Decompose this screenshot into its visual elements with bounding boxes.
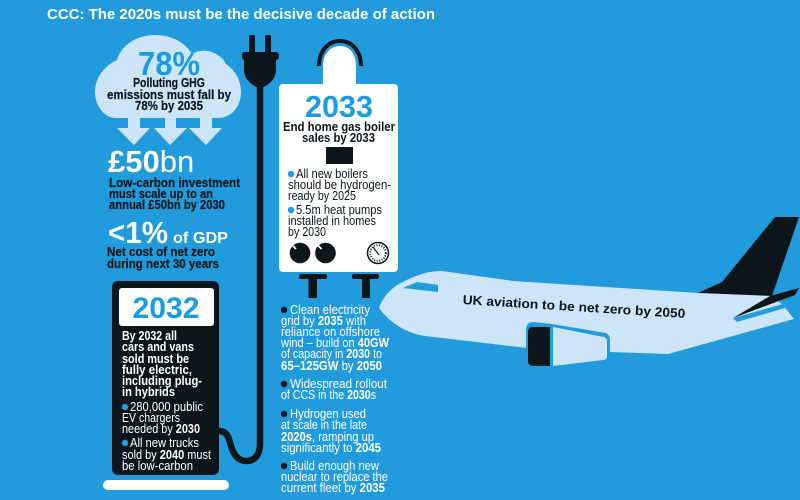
cloud text [107, 76, 231, 113]
year badge: 2032 [119, 288, 214, 326]
GDP text: Net cost of net zero [107, 245, 215, 259]
GDP text: during next 30 years [107, 257, 219, 271]
2032 headline text: cars and vans [122, 340, 194, 354]
cloud: 78% emissions stat [95, 35, 241, 118]
bullet: hydrogen-ready boilers: All new boilers [296, 167, 368, 181]
bullet: CCS: of CCS in the 2030s [281, 388, 376, 402]
bullet: heat pumps: 5.5m heat pumps [296, 203, 382, 217]
bullet list: energy targets [280, 303, 389, 495]
bullet: nuclear: Build enough new [290, 459, 380, 473]
stat: less than 1% of GDP: of GDP [173, 230, 228, 247]
GDP text [107, 245, 219, 271]
stat: less than 1% of GDP: <1% [108, 215, 168, 250]
stat: less than 1% of GDP [107, 215, 228, 271]
bullet: EV chargers [122, 400, 203, 436]
bullet: heat pumps: by 2030 [288, 225, 326, 239]
bullet: hydrogen-ready boilers: ready by 2025 [288, 189, 356, 203]
bullet: clean electricity: 65–125GW by 2050 [281, 359, 382, 373]
investment text: Low-carbon investment [109, 176, 241, 190]
bullet: clean electricity: grid by 2035 with [281, 314, 366, 328]
boiler display [326, 147, 353, 164]
2032 headline text: By 2032 all [122, 329, 177, 343]
illustration: aeroplane [379, 217, 799, 367]
bullet: hydrogen: 2020s, ramping up [281, 430, 374, 444]
year: 2033: 2033 [305, 89, 373, 124]
cockpit window [403, 282, 438, 292]
bullet: low-carbon trucks: be low-carbon [122, 459, 193, 473]
2032 headline text: fully electric, [122, 363, 192, 377]
bullet: low-carbon trucks: sold by 2040 must [122, 448, 211, 462]
2032 headline text [122, 329, 202, 399]
cloud text: emissions must fall by [107, 88, 231, 102]
aviation label: UK aviation to be net zero by 2050 [462, 292, 686, 321]
tail stabiliser stripe [733, 304, 785, 322]
bullet: heat pumps: installed in homes [288, 214, 376, 228]
boiler dial left [290, 243, 310, 263]
big figure: 78%: 78% [138, 45, 200, 82]
bullet: heat pumps [288, 203, 382, 239]
bullet: low-carbon trucks [122, 436, 211, 473]
icon: boiler flue [319, 41, 361, 84]
icon: plug [242, 35, 279, 87]
boiler headline [283, 120, 395, 145]
bullet: hydrogen [281, 407, 381, 455]
panel: 2032 electric cars [112, 281, 219, 475]
2032 headline text: sold must be [122, 352, 189, 366]
bullet: EV chargers: 280,000 public [130, 400, 203, 414]
cloud text: 78% by 2035 [135, 99, 203, 113]
boiler pressure gauge [368, 242, 388, 264]
stat: £50bn investment [108, 144, 241, 212]
icon: three down arrows [117, 118, 222, 145]
title: CCC: The 2020s must be the decisive decade of action [47, 7, 435, 23]
cloud text: Polluting GHG [133, 76, 205, 90]
investment text: must scale up to an [109, 187, 213, 201]
panel: 2033 gas boiler [279, 84, 398, 272]
plug cord [219, 85, 260, 461]
white stand bar [103, 480, 229, 490]
bullet: hydrogen: Hydrogen used [290, 407, 366, 421]
bullet: clean electricity [280, 303, 389, 373]
tail fin [698, 217, 799, 296]
boiler dial right [315, 243, 336, 263]
boiler headline: sales by 2033 [302, 131, 375, 145]
2032 headline text: in hybrids [122, 385, 175, 399]
bullet: nuclear: current fleet by 2035 [281, 481, 385, 495]
bullet: clean electricity: reliance on offshore [281, 325, 380, 339]
bullet: nuclear: nuclear to replace the [281, 470, 388, 484]
boiler pipes [299, 274, 379, 298]
bullet: hydrogen-ready boilers [288, 167, 391, 203]
bullet: CCS: Widespread rollout [290, 377, 387, 391]
bullet: clean electricity: of capacity in 2030 to [281, 347, 382, 361]
engine [526, 322, 610, 367]
2032 headline text: including plug- [122, 374, 202, 388]
fuselage [379, 271, 794, 354]
bullet: CCS [281, 377, 387, 402]
boiler headline: End home gas boiler [283, 120, 395, 134]
year badge: 2032: 2032 [132, 292, 200, 325]
investment text: annual £50bn by 2030 [109, 198, 225, 212]
bullet: low-carbon trucks: All new trucks [130, 436, 199, 450]
bullet: nuclear [281, 459, 388, 495]
investment text [109, 176, 241, 212]
tail stabiliser [733, 288, 799, 318]
bullet: hydrogen: significantly to 2045 [281, 441, 381, 455]
stat: £50bn investment: £50bn [108, 144, 194, 179]
bullet: clean electricity: wind – build on 40GW [280, 336, 389, 350]
bullet: clean electricity: Clean electricity [290, 303, 371, 317]
bullet: hydrogen-ready boilers: should be hydrogen- [288, 178, 391, 192]
bullet: hydrogen: at scale in the late [281, 418, 367, 432]
bullet: EV chargers: EV chargers [122, 411, 180, 425]
bullet: EV chargers: needed by 2030 [122, 422, 200, 436]
